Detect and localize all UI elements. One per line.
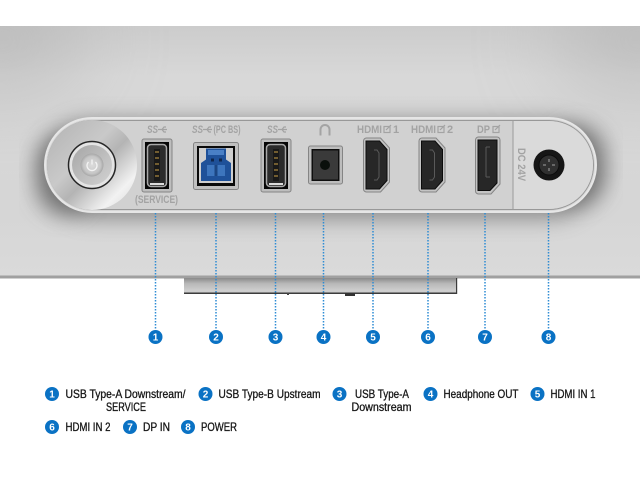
port 8: power connector <box>534 150 564 180</box>
legend <box>45 387 596 434</box>
legend item 6: HDMI IN 2 <box>66 420 111 434</box>
port 7: DisplayPort <box>476 137 500 194</box>
legend item 3: USB Type-A <box>355 387 409 401</box>
legend item 7: 7 <box>127 422 133 434</box>
legend item 4: 4 <box>428 390 434 400</box>
power button <box>47 120 137 210</box>
label: hdmi 1 <box>357 124 399 136</box>
legend item 3 <box>332 387 412 414</box>
stand base <box>184 278 457 296</box>
port panel <box>36 118 606 218</box>
callout 8: 8 <box>546 332 552 344</box>
legend item 1: 1 <box>49 390 55 400</box>
legend item 6 <box>45 420 111 434</box>
callout numbers <box>148 330 556 344</box>
legend item 8 <box>181 420 237 434</box>
callout 5: 5 <box>370 332 376 344</box>
legend item 5: 5 <box>535 390 541 400</box>
legend item 1: SERVICE <box>106 400 146 414</box>
legend item 1 <box>45 387 186 414</box>
port 2: USB Type-B upstream <box>194 142 238 190</box>
callout 3 <box>268 330 282 344</box>
label: dp: DP <box>477 124 490 136</box>
legend item 3: 3 <box>337 390 343 400</box>
callout 2 <box>209 330 223 344</box>
callout 1: 1 <box>153 332 159 344</box>
label: hdmi 2: HDMI <box>411 124 436 136</box>
callout 2: 2 <box>213 332 219 344</box>
dotted leader lines <box>156 213 548 330</box>
port 3: USB Type-A downstream <box>261 139 291 192</box>
legend item 4: Headphone OUT <box>444 387 519 401</box>
callout 7: 7 <box>482 332 488 344</box>
callout 8 <box>542 330 556 344</box>
legend item 4 <box>424 387 519 401</box>
legend item 5 <box>530 387 596 401</box>
port 1: USB Type-A service <box>142 139 172 192</box>
label: hdmi 1: HDMI <box>357 124 382 136</box>
label: hdmi 1: 1 <box>393 124 399 136</box>
label: usb symbol pc bs <box>192 124 241 136</box>
label: hdmi 2: 2 <box>447 124 453 136</box>
port 4: headphone jack <box>308 146 342 184</box>
callout 7 <box>478 330 492 344</box>
legend item 7: DP IN <box>143 420 170 434</box>
callout 6 <box>421 330 435 344</box>
callout 5 <box>366 330 380 344</box>
port 5: HDMI 1 <box>364 138 390 192</box>
label: usb symbol 3: SS <box>267 124 278 136</box>
legend item 8: 8 <box>185 422 191 434</box>
label: usb symbol pc bs: (PC BS) <box>214 124 241 136</box>
callout 6: 6 <box>425 332 431 344</box>
callout 1 <box>148 330 162 344</box>
callout 4: 4 <box>321 332 327 344</box>
legend item 2: USB Type-B Upstream <box>218 387 321 401</box>
label: usb symbol pc bs: SS <box>192 124 203 136</box>
port 6: HDMI 2 <box>419 138 445 192</box>
legend item 8: POWER <box>201 420 237 434</box>
icon: headphones <box>320 125 330 136</box>
monitor body <box>0 0 640 278</box>
label: dp <box>477 124 500 136</box>
label: usb symbol 1: SS <box>147 124 158 136</box>
label: service: (SERVICE) <box>135 194 178 206</box>
legend item 2: 2 <box>203 390 209 400</box>
legend item 5: HDMI IN 1 <box>550 387 596 401</box>
label: dc 24v: DC 24V <box>515 148 527 182</box>
legend item 1: USB Type-A Downstream/ <box>66 387 186 401</box>
legend item 3: Downstream <box>352 400 412 414</box>
callout 3: 3 <box>273 332 279 344</box>
legend item 7 <box>123 420 170 434</box>
label: hdmi 2 <box>411 124 453 136</box>
legend item 6: 6 <box>49 422 55 434</box>
callout 4 <box>316 330 330 344</box>
